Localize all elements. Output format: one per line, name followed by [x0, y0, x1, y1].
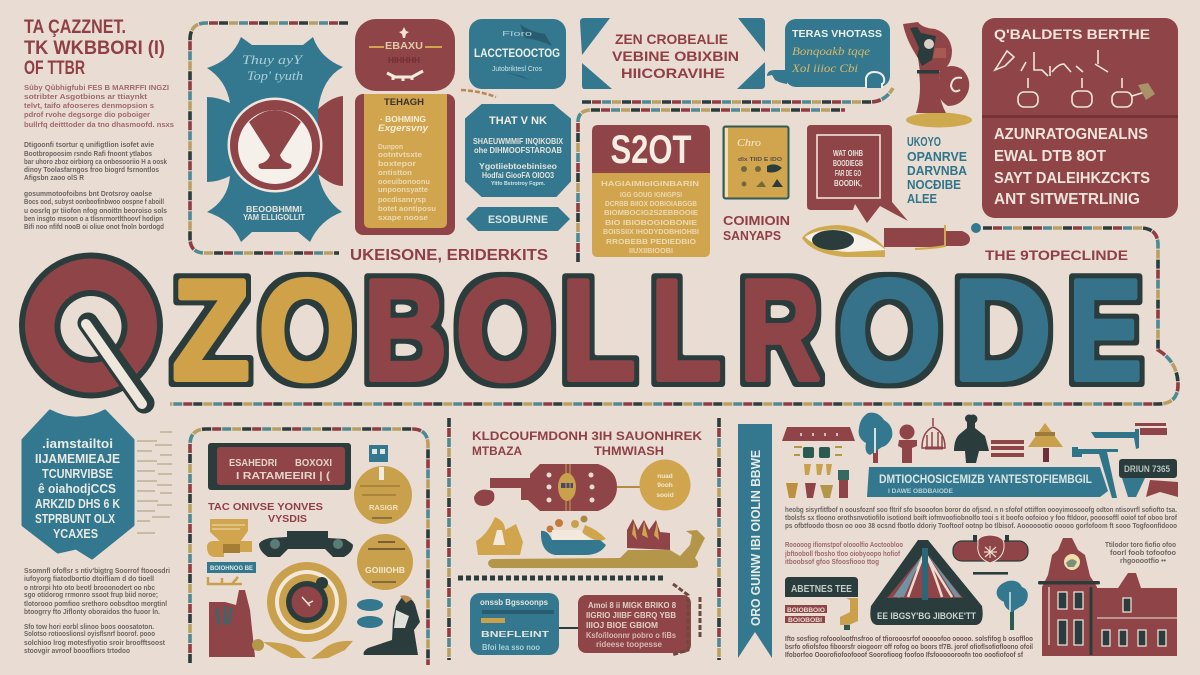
panel: red how-to panel: AZUNRATOGNEALNS — [994, 126, 1148, 143]
label: red framed sign: I RATAMEEIRI | ( — [236, 471, 331, 482]
caption: Coimioin Sanyaps: SANYAPS — [723, 229, 781, 243]
panel: red how-to panel — [982, 18, 1178, 218]
emblem: blue shield with goblet — [207, 37, 343, 242]
title: Qzobollrode: B — [364, 251, 447, 410]
label: red framed sign — [208, 443, 351, 490]
decorative lines: badge labels — [137, 432, 172, 533]
illustration: red brick buildings — [1038, 538, 1177, 656]
text block: red note left of tent: jbftooboll fbosho tloo oiobyoopo hofiof — [784, 549, 900, 558]
decorative beads by red note — [672, 584, 700, 655]
panel: blue note: BNEFLEINT — [481, 630, 549, 639]
panel: blue note — [470, 593, 559, 655]
text block: teal side note — [907, 134, 968, 206]
icon: dark binoculars — [259, 531, 353, 557]
badge: blue shield text: YCAXES — [53, 526, 98, 541]
speech bubble: red with frame: FAR DE GO — [835, 169, 861, 178]
emblem: blue shield with goblet: Thuy ayY — [242, 52, 304, 67]
title: Qzobollrode: O — [259, 251, 355, 410]
panel: red how-to panel: ANT SITWETRLINIG — [994, 191, 1140, 208]
text block: red note left of tent — [784, 540, 903, 566]
panel: Zen ribbon banner — [580, 18, 765, 89]
icon: gold wings — [263, 641, 353, 659]
ribbon: vertical blue — [738, 424, 772, 658]
badge: blue shield text: ARKZID DHS 6 K — [35, 496, 120, 511]
badge: blue shield text: IIJAMEMIEAJE — [35, 451, 120, 466]
text block: lower left paragraph one: iufoyorg fiatodbortio dtoifliam d do tioell — [24, 574, 154, 583]
text block: right note: Ttilodor toro fiofio ofoo — [1105, 540, 1176, 549]
illustration: shop stall — [782, 427, 855, 498]
caption: Coimioin Sanyaps — [723, 214, 790, 243]
text block: top left intro: telvt, taifo afooseres denmopsion s — [24, 101, 154, 110]
beaded frame: lower left panel — [190, 429, 428, 665]
label: dark tag with stripes and gold tap: ABETNES TEE — [791, 583, 852, 595]
beaded frame: top left panel — [190, 23, 348, 253]
icon: blue tree — [859, 413, 892, 463]
panel: red rounded label: EBAXU — [385, 41, 423, 52]
panel: Zen ribbon banner: HIICORAVIHE — [621, 65, 725, 81]
panel: S2OT card: BOISSIIX IHODYDOBHIOHBI — [603, 227, 699, 236]
text block: right note — [1105, 540, 1176, 565]
text block: right note: foorl foob tofoofoo — [1110, 548, 1176, 557]
speech bubble: red with frame: BOODIEGB — [833, 159, 863, 168]
badge: blue shield text — [23, 411, 133, 558]
heading: Tac Onivse Yonves: TAC ONIVSE YONVES — [208, 501, 323, 513]
tag: dark label with illustration — [1119, 459, 1178, 497]
panel: S2OT card: BIO IBIOBOGIOBONIE — [605, 218, 697, 227]
text block: left third paragraph: Bifi noo nfifd nooB oi oliue onot fnoln bordogd — [24, 222, 164, 231]
text block: top left intro: bullrfq deitttoder da tno dhasmoofd. nsxs — [24, 120, 174, 129]
icon: gold round badge: GOIIIOHB — [365, 566, 405, 575]
text block: lower left paragraph one — [24, 566, 170, 616]
icon: vase figure — [903, 22, 972, 128]
panel: red and gold list card: ootntvtsxte — [378, 150, 422, 159]
heading: Tac Onivse Yonves: VYSDIS — [268, 513, 307, 525]
heading: Tac Onivse Yonves — [208, 501, 323, 525]
text block: red note left of tent: itboobsof gfoo Sfoosfiooo ttog — [785, 557, 879, 566]
beaded frame: lower center panel sides — [449, 418, 719, 660]
panel: That V Nk blue notched card: SHAEUWMMIF INQIKOBIX — [473, 137, 564, 146]
text block: lower left paragraph one: sgo otidorog rrmonro ssoot frup biid noroe; — [24, 590, 158, 599]
panel: S2OT card: IIUXIIBIOOBI — [629, 246, 673, 255]
icon: dark figure — [954, 414, 989, 463]
panel: red how-to panel: SAYT DALEIHKZCKTS — [994, 170, 1150, 187]
panel: red how-to panel: EWAL DTB 8OT — [994, 148, 1106, 165]
decorative dots row — [458, 576, 663, 580]
text block: lower left paragraph two: solchioo lrog motesfiyotio sroir broofftsoost — [24, 638, 165, 647]
text block: right note: rhgooootfio •• — [1120, 556, 1166, 565]
icon: blue discs — [357, 599, 383, 628]
text block: bottom paragraph: bsrfo ofiofsfoo fiboorsfr oiogoorr off rofog oo boors tf7B. jorof ofioflsofiofloono ofoil — [785, 642, 1033, 651]
text block: teal side note: ALEE — [907, 191, 937, 206]
text block: bottom paragraph: Ifto sosfiog rofooolootfnsfroo of tfiorooosrfof ooooofoo ooooo. solsfifog b osoffloo — [785, 634, 1033, 643]
text block: bottom paragraph: Ifoborfoo Ooorofiofoofooof Soorofioog foofoo Ifsfoooooroofn too ooofiofoof sf — [785, 650, 1023, 659]
panel: blue note: Bfoi lea sso noo — [482, 643, 540, 652]
text block: lower left paragraph one: btoogrry fto Jiflonty oboraidos tho fuoor ln. — [24, 607, 160, 616]
speech bubble: red with frame: BOODIK, — [834, 179, 862, 188]
icon: gold cone lamp — [1028, 423, 1063, 462]
icon: red bust — [898, 424, 917, 463]
title: Qzobollrode: L — [651, 251, 721, 410]
text block: lower left paragraph one: tlotorooo pomfioo srethoro oobsdtoo morgtinl — [24, 599, 167, 608]
ribbon: vertical blue: ORO GUINW IBI OIOLIN BBWE — [749, 450, 763, 626]
icon: small blue tree — [997, 581, 1028, 630]
beaded connector: short — [461, 90, 496, 97]
panel: red rounded label — [355, 19, 455, 91]
illustration: gold figures, blue boat, red crown on gold base — [476, 516, 705, 568]
title: Qzobollrode: D — [954, 251, 1051, 410]
text block: left second paragraph: Afigsbn zaoo olS R — [24, 173, 85, 182]
emblem: blue shield with goblet: BEOOBHMMI — [246, 205, 302, 214]
chart: gold ring gauge — [267, 562, 347, 642]
text block: left third paragraph — [24, 189, 167, 231]
text block: top left intro: sotribter Asgotbions ar ttiaynkt — [24, 92, 148, 101]
beaded frame: center panel — [578, 88, 893, 262]
illustration: red capsule with gold tag: 9ooh — [657, 482, 673, 489]
text block: lower left paragraph two: Solotso rotiooslionsl oyisflsnrf boorof. pooo — [24, 629, 155, 638]
panel: red note: Ksfo/iloonnr pobro o fiBs — [586, 631, 677, 640]
illustration: red capsule with gold tag: nuad — [657, 473, 673, 480]
heading: top left — [24, 17, 165, 79]
title: Qzobollrode: O — [456, 251, 554, 410]
text block: lower left paragraph two — [24, 622, 165, 655]
icon: seated figure — [364, 595, 420, 655]
text block: left second paragraph: Bootbropoosim rsndo Rafi fnoont ytlabos — [24, 149, 152, 158]
text block: left second paragraph: dinoy Toolasfarngos froo biogrd fsrnontlos — [24, 165, 159, 174]
icon: teal hammers and stripes — [1072, 423, 1167, 498]
panel: blue card top: Jutobriktesl Cros — [492, 66, 542, 73]
icon: gold booklet — [724, 126, 788, 198]
title: Qzobollrode: E — [1069, 251, 1142, 410]
panel: S2OT card: HAGIAIMIoIGINBARIN — [601, 179, 699, 188]
text block: top left intro — [24, 83, 174, 129]
text block: left second paragraph: bar uhoro zboz oirbiorg ca onbosooriio H a oosk — [24, 157, 168, 166]
text block: left third paragraph: Bocs ood, subyst oonboofinbwoo oospne f aboill — [24, 197, 164, 206]
icon: gold antlers — [208, 577, 242, 584]
panel: red and gold list card: Exgersvny — [378, 123, 429, 133]
text block: left second paragraph: Dtigoonfi tsortur q unifigtlion isofet avie — [24, 140, 154, 149]
label: small blue tag — [207, 562, 256, 573]
panel: blue card top: LACCTEOOCTOG — [474, 46, 560, 60]
text block: lower left paragraph two: stoovgir avroof booofliors trtodoo — [24, 646, 130, 655]
icon: red stripes — [991, 440, 1024, 457]
text block: teal side note: UKOYO — [907, 134, 941, 149]
illustration: red capsule with gold tag: sooid — [656, 492, 674, 499]
badge: blue shield text: ê oiahodjCCS — [38, 481, 116, 496]
panel: That V Nk blue notched card: THAT V NK — [489, 115, 547, 127]
badge: blue shield text: STPRBUNT OLX — [35, 511, 115, 526]
illustration: red capsule with gold tag — [474, 460, 690, 511]
panel: S2OT card: IGG GOUG IGNIGPSI — [620, 190, 682, 199]
icon: dome cage — [922, 418, 945, 448]
panel: red and gold list card: pocdisanrysp — [378, 195, 426, 204]
heading: lower center: KLDCOUFMDONH 3IH SAUONHREK — [472, 429, 702, 443]
heading: top left: OF TTBR — [24, 58, 85, 79]
panel: red and gold list card: Dunpon — [378, 142, 403, 151]
text block: lower left paragraph one: Ssomnfl ofoflsr s ntiv'bigtrg Soorrof ftooosdri — [24, 566, 170, 575]
panel: red note — [578, 595, 691, 653]
speech bubble: red with frame — [807, 125, 908, 223]
panel: S2OT card: RROBEBB PEDIEDBIO — [606, 237, 696, 246]
heading: lower center — [472, 429, 702, 458]
label: Esoburne blue tag: ESOBURNE — [488, 214, 548, 226]
text block: wide paragraph — [785, 505, 1177, 530]
icon: blue tag with gold dial — [354, 445, 412, 524]
heading: top left: TA ÇAZZNET. — [24, 17, 126, 38]
label: dark tag with stripes and gold tap — [785, 577, 858, 630]
tag: dark label with illustration: DRIUN 7365 — [1124, 464, 1170, 474]
panel: red and gold list card: botet aontiposu — [378, 204, 436, 213]
title: Qzobollrode: L — [562, 251, 635, 410]
emblem: blue shield with goblet: YAM ELLIGOLLIT — [243, 213, 305, 222]
text block: left third paragraph: ben insgto msoon o a tlisnrmortlthoovf hodipn — [24, 214, 163, 223]
text block: lower left paragraph two: Sfo tow hori eorbl slinoo boos ooosatoton. — [24, 622, 154, 631]
icon: gold booklet: dlx TIID E IDO — [738, 157, 782, 163]
connector: note to red card — [559, 627, 578, 629]
text block: teal side note: DARVNBA — [907, 163, 968, 178]
title: Qzobollrode: R — [740, 251, 820, 410]
panel: blue card top — [469, 19, 566, 89]
speech bubble: red with frame: WAT OIHB — [833, 149, 863, 158]
banner: blue title strip — [867, 467, 1108, 497]
icon: spoon tool — [802, 225, 970, 257]
text block: teal side note: OPANRVE — [907, 149, 967, 164]
icon: red barrel pair — [953, 535, 1028, 575]
panel: red rounded label: HIHHHH — [388, 56, 420, 65]
text block: teal side note: NOCÐIBE — [907, 177, 961, 192]
panel: red note: IIIOJ BIOE GBIOM — [586, 621, 658, 630]
text block: top left intro: Sûby Qûbhigfubi FES B MARRFFI INGZI — [24, 83, 169, 92]
panel: Zen ribbon banner: ZEN CROBEALIE — [615, 31, 728, 47]
heading: lower center: THMWIASH — [594, 444, 664, 458]
text block: left third paragraph: u oosrlq pr tiiofon nfog onoittn beoroiso sols — [24, 206, 167, 215]
illustration: striped tent — [870, 540, 983, 625]
panel: blue note: onssb Bgssoonps — [480, 598, 549, 607]
label: red framed sign: ESAHEDRI — [229, 458, 277, 469]
title: Qzobollrode: Q — [22, 225, 160, 424]
panel: red and gold list card: sxape noose — [378, 213, 428, 222]
panel: That V Nk blue notched card: Ygotiiebtoebiniseo — [479, 162, 557, 171]
panel: red and gold list card — [355, 94, 455, 235]
illustration: striped tent: EE IBGSY'BG JIBOKE'TT — [877, 611, 976, 621]
banner: blue title strip: I DAWE OBDBAIODE — [888, 488, 954, 495]
label: red framed sign: BOXOXI — [295, 458, 332, 469]
title: Qzobollrode: O — [838, 251, 941, 410]
text block: bottom paragraph — [785, 634, 1033, 659]
panel: red how-to panel: Q'BALDETS BERTHE — [994, 26, 1150, 42]
panel: red and gold list card: · BOHMING — [380, 115, 426, 124]
heading: top left: TK WKBBORI (I) — [24, 38, 165, 59]
speech bubble: Teras blue: Xol iiioc Cbi — [791, 61, 858, 75]
text block: top left intro: pdrof rvohe degsorge dio poboiger — [24, 110, 150, 119]
icon: gold round badge — [357, 534, 413, 590]
panel: blue card top: Fīoro — [502, 31, 532, 38]
emblem: blue shield with goblet: Top' tyuth — [247, 68, 303, 83]
label: Esoburne blue tag — [466, 207, 570, 231]
panel: S2OT card: DCRBB BIIOX DOBIOIABGGB — [605, 199, 697, 208]
panel: red and gold list card: ooeuibonoonu — [378, 177, 430, 186]
panel: Zen ribbon banner: VEBINE OBIXBIN — [612, 48, 739, 64]
speech bubble: Teras blue: Bonqoakb tqqe — [792, 44, 871, 58]
panel: S2OT card — [592, 125, 710, 257]
panel: red note: Amoi 8 ii MIGK BRIKO 8 — [588, 601, 677, 610]
badge: blue shield text: TCUNRVIBSE — [42, 466, 113, 481]
panel: That V Nk blue notched card: ohe DIHMOOFSTAROAB — [474, 146, 562, 155]
label: dark tag with stripes and gold tap: BOIOBOBI — [788, 618, 822, 624]
panel: red note: IIGRIO JIIBF GBRQ YBB — [586, 611, 676, 620]
text block: red note left of tent: Rooooog ifiomstpof olooolfio Aoctoobloo — [785, 540, 903, 549]
panel: red and gold list card: TEHAGH — [384, 97, 424, 107]
title: Qzobollrode — [19, 252, 1145, 414]
panel: S2OT card: S2OT — [610, 128, 692, 172]
beaded connector: right side into title — [170, 223, 1178, 404]
label: dark tag with stripes and gold tap: BOIOBBOIO — [787, 608, 825, 614]
title: Qzobollrode: Z — [172, 251, 250, 410]
speech bubble: Teras blue: TERAS VHOTASS — [792, 28, 882, 40]
panel: red and gold list card: boxtepor — [378, 159, 416, 168]
icon: gold booklet: Chro — [737, 138, 761, 149]
text block: left second paragraph — [24, 140, 168, 182]
heading: lower center: MTBAZA — [472, 444, 522, 458]
panel: red note: rideese toopesse — [596, 640, 663, 649]
panel: That V Nk blue notched card: Yitfo Bstrotroy Fqpm. — [491, 181, 545, 187]
panel: That V Nk blue notched card — [466, 105, 570, 196]
icon: blue tag with gold dial: RASIGR — [369, 505, 398, 512]
panel: red and gold list card: ontistton — [378, 168, 412, 177]
banner: blue title strip: DMTIOCHOSICEMIZB YANTESTOFIEMBGIL — [879, 472, 1092, 486]
label: small blue tag: BOIOHNOG BE — [210, 565, 254, 572]
panel: S2OT card: BIOMBOCIG2S2EBBOOIE — [604, 208, 698, 217]
panel: That V Nk blue notched card: Hodfai GiooFA OIOO3 — [482, 171, 554, 180]
text block: lower left paragraph one: o ntrorpi hto oto beotl brooonodert oo nbc — [24, 583, 155, 592]
panel: red and gold list card: unpoonsyatte — [378, 185, 428, 194]
badge: blue shield text: .iamstailtoi — [42, 436, 113, 451]
speech bubble: Teras blue — [767, 19, 890, 88]
text block: left third paragraph: gosummotoofoibns bnt Drotsroy oaolse — [24, 189, 152, 198]
caption: Coimioin Sanyaps: COIMIOIN — [723, 214, 790, 228]
icon: gold grinder — [207, 519, 252, 557]
caption: The Stopeclinde: THE 9TOPECLINDE — [985, 247, 1128, 263]
icon: red blender — [209, 590, 264, 657]
caption: Ukeisone: UKEISONE, ERIDERKITS — [350, 247, 548, 264]
